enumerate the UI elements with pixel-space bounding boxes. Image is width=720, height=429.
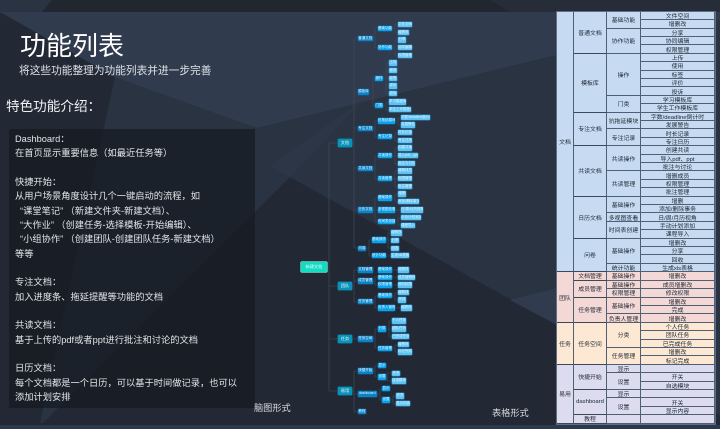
subtitle: 将这些功能整理为功能列表并进一步完善 xyxy=(19,65,211,77)
feature table: 显示 xyxy=(618,367,629,373)
root node xyxy=(301,262,327,272)
text block: feature descriptions: 专注文档： xyxy=(15,277,61,287)
branch: 文档: 标签 xyxy=(390,76,396,80)
feature table: 显示内容 xyxy=(666,409,689,415)
feature table: 协作功能 xyxy=(612,39,635,45)
feature table: 任务管理 xyxy=(612,354,635,360)
feature table: 增删改 xyxy=(669,317,686,323)
text block: feature descriptions: 快捷开始： xyxy=(15,177,61,187)
branch: 文档: 普通文档 xyxy=(358,36,372,40)
feature table: 多视图查看 xyxy=(609,216,638,222)
feature table: 文档 xyxy=(559,140,571,146)
feature table: 完成 xyxy=(672,308,683,314)
feature table: 发展警告 xyxy=(666,123,689,129)
text block: feature descriptions: “大作业” （创建任务-选择模板-开始编辑）、 xyxy=(20,220,197,230)
branch: 易用: 快捷开始 xyxy=(358,368,372,372)
feature table: 学习模板库 xyxy=(663,98,692,104)
feature table: 操作 xyxy=(618,73,629,79)
feature table: 任务 xyxy=(559,342,571,348)
branch: 文档: 增删改 xyxy=(398,30,408,34)
feature table: 基础操作 xyxy=(612,203,635,209)
branch: 文档: 导入pdf、ppt xyxy=(398,153,418,157)
branch: 文档: 评价 xyxy=(390,83,396,87)
feature table: 时长记录 xyxy=(666,132,689,138)
text block: feature descriptions: “小组协作” （创建团队-创建团队任务-新建文档） xyxy=(20,234,220,244)
feature table: 成员管理 xyxy=(578,287,602,293)
feature table: 使用 xyxy=(672,64,683,70)
branch: 文档: 分享 xyxy=(392,238,398,242)
feature table: 基础功能 xyxy=(612,18,635,24)
branch: 团队: 增删改 xyxy=(398,267,408,271)
branch: 文档: 门类 xyxy=(376,103,382,107)
feature table: 开关 xyxy=(672,401,683,407)
feature table: 导入pdf、ppt xyxy=(660,157,695,163)
feature table: 共读操作 xyxy=(612,157,635,163)
feature table: 课程导入 xyxy=(666,232,689,238)
text block: feature descriptions xyxy=(15,134,237,402)
feature table: 抗拖延模块 xyxy=(609,119,638,125)
feature table: 时间表创建 xyxy=(609,228,638,234)
branch: 文档: 增删 xyxy=(398,191,406,195)
feature table: 增删改 xyxy=(669,241,686,247)
feature table: 增删改 xyxy=(669,274,686,280)
feature table: 标记完成 xyxy=(666,359,689,365)
branch: 文档 xyxy=(338,21,431,259)
feature table: 设置 xyxy=(618,380,629,386)
branch: 易用: dashboard xyxy=(359,391,376,395)
feature table: 任务管理 xyxy=(578,308,602,314)
feature table: 统计功能 xyxy=(612,266,635,272)
branch: 文档: 操作 xyxy=(376,76,382,80)
text block: feature descriptions: “课堂笔记” （新建文件夹-新建文档）、 xyxy=(20,206,175,216)
feature table: 基础操作 xyxy=(612,283,635,289)
branch: 文档: 回收 xyxy=(392,246,398,250)
branch: 文档: 日历文档 xyxy=(358,207,372,211)
feature table: 上传 xyxy=(672,56,683,62)
feature table: 文档管理 xyxy=(578,274,602,280)
text block: feature descriptions: 加入进度条、拖延提醒等功能的文档 xyxy=(15,292,163,302)
feature table: 回收 xyxy=(672,258,683,264)
feature table: 修改权限 xyxy=(666,291,689,297)
feature table: 负责人管理 xyxy=(609,317,638,323)
feature table: 批注管理 xyxy=(666,190,689,196)
feature table: 添加/删除事务 xyxy=(659,207,696,213)
branch: 文档: 增删改 xyxy=(391,230,402,234)
branch: 易用: 显示 xyxy=(382,386,390,390)
feature table: 设置 xyxy=(618,405,629,411)
feature table: 评价 xyxy=(672,81,683,87)
feature table: 增删改 xyxy=(669,350,686,356)
feature table: 生成xls表格 xyxy=(662,266,693,272)
feature table: 手动计划添加 xyxy=(660,224,695,230)
feature table: 日/周/月历视角 xyxy=(658,216,697,222)
feature table: 专注记录 xyxy=(612,136,635,142)
feature table: 个人任务 xyxy=(666,325,689,331)
section heading: 特色功能介绍： xyxy=(6,99,101,114)
branch: 任务: 增删改 xyxy=(398,342,408,346)
feature table: 权限管理 xyxy=(612,291,635,297)
branch: 任务: 任务空间 xyxy=(358,336,372,340)
text block: feature descriptions: 等等 xyxy=(15,249,34,259)
feature table: 任务空间 xyxy=(578,342,602,348)
feature table: dashboard xyxy=(576,399,604,405)
branch: 团队: 增删改 xyxy=(401,305,412,309)
feature table: 问卷 xyxy=(584,253,596,259)
feature table: 基础操作 xyxy=(612,274,635,280)
branch: 文档: 投诉 xyxy=(390,91,396,95)
feature table: 显示 xyxy=(618,392,629,398)
feature table: 自选模块 xyxy=(666,384,689,390)
branch: 文档: 使用 xyxy=(390,68,396,72)
branch: 文档: 分享 xyxy=(398,37,406,41)
text block: feature descriptions: 在首页显示重要信息（如最近任务等） xyxy=(15,148,172,158)
branch: 易用: 开关 xyxy=(396,393,404,397)
feature table: 分类 xyxy=(618,333,629,339)
text block: feature descriptions: 基于上传的pdf或者ppt进行批注和讨论的文档 xyxy=(15,335,198,345)
feature table: 易用 xyxy=(559,392,571,398)
feature table: 团队 xyxy=(559,296,571,302)
branch: 团队: 团队 xyxy=(341,283,349,288)
caption: table form: 表格形式 xyxy=(492,408,529,418)
feature table xyxy=(557,12,715,424)
feature table: 共读管理 xyxy=(612,182,635,188)
branch: 易用: 易用 xyxy=(341,388,349,393)
branch: 团队 xyxy=(338,266,416,312)
text block: feature descriptions: 从用户场景角度设计几个一键启动的流程，如 xyxy=(15,191,200,201)
branch: 文档: 模板库 xyxy=(358,89,369,93)
feature table: 增删改 xyxy=(669,22,686,28)
feature table: 创建共读 xyxy=(666,148,689,154)
branch: 任务: 分类 xyxy=(378,326,386,330)
feature table: 标签 xyxy=(672,73,683,79)
feature table: 分享 xyxy=(672,31,683,37)
branch: 团队: 成员管理 xyxy=(358,278,372,282)
branch: 团队: 任务管理 xyxy=(358,299,372,303)
branch: 易用: 显示 xyxy=(378,363,386,367)
feature table: 协同编辑 xyxy=(666,39,689,45)
feature table: 已完成任务 xyxy=(663,342,692,348)
branch: 团队: 增删改 xyxy=(398,290,408,294)
branch: 文档: 问卷 xyxy=(358,246,366,250)
caption: mind map form: 脑图形式 xyxy=(254,403,291,413)
text block: feature descriptions: 日历文档： xyxy=(15,363,61,373)
feature table: 增删改 xyxy=(669,300,686,306)
branch: 易用 xyxy=(338,362,411,414)
feature table: 教程 xyxy=(584,417,596,423)
text block: feature descriptions: Dashboard： xyxy=(15,134,70,144)
feature table: 开关 xyxy=(672,375,683,381)
branch: 易用: 设置 xyxy=(382,397,390,401)
branch: 易用: 开关 xyxy=(392,371,400,375)
feature table: 文件空间 xyxy=(666,14,689,20)
branch: 文档: 共读文档 xyxy=(358,166,372,170)
title: 功能列表 xyxy=(20,31,124,61)
feature table: 字数/deadline倒计时 xyxy=(651,115,704,121)
feature table: 学生工作模板库 xyxy=(657,106,698,112)
branch: 任务: 任务 xyxy=(341,336,349,341)
branch: 文档: 文档 xyxy=(341,140,349,145)
feature table: 日历文档 xyxy=(578,216,602,222)
branch: 团队: 完成 xyxy=(398,297,406,301)
text block: feature descriptions: 共读文档： xyxy=(15,320,61,330)
feature table: 模板库 xyxy=(581,81,599,87)
feature table: 专注文档 xyxy=(578,127,602,133)
panel: feature introductions xyxy=(9,129,255,408)
feature table: 分享 xyxy=(672,249,683,255)
branch: 易用: 教程 xyxy=(358,409,366,413)
root node: 新建文档 xyxy=(306,264,322,269)
text block: feature descriptions: 每个文档都是一个日历，可以基于时间做记录，也可以 xyxy=(15,378,237,388)
feature table: 基础操作 xyxy=(612,304,635,310)
branch: 任务 xyxy=(338,317,413,356)
feature table: 增删 xyxy=(672,199,683,205)
feature table: 共读文档 xyxy=(578,169,602,175)
feature table: 批注与讨论 xyxy=(663,165,692,171)
feature table: 基础操作 xyxy=(612,249,635,255)
branch: 易用: 设置 xyxy=(378,374,386,378)
text block: feature descriptions: 添加计划安排 xyxy=(15,392,70,402)
feature table: 成员增删改 xyxy=(663,283,692,289)
feature table: 增删成员 xyxy=(666,174,689,180)
branch: 文档: 上传 xyxy=(390,60,396,64)
feature table: 专注日历 xyxy=(666,140,689,146)
feature table: 权限管理 xyxy=(666,182,689,188)
feature table: 投诉 xyxy=(672,90,683,96)
feature table: 团队任务 xyxy=(666,333,689,339)
branch: 文档: 专注文档 xyxy=(358,126,372,130)
feature table: 权限管理 xyxy=(666,48,689,54)
feature table: 普通文档 xyxy=(578,31,602,37)
branch: 团队: 文档管理 xyxy=(358,267,372,271)
feature table: 门类 xyxy=(618,102,629,108)
feature table: 快捷开始 xyxy=(578,375,602,381)
